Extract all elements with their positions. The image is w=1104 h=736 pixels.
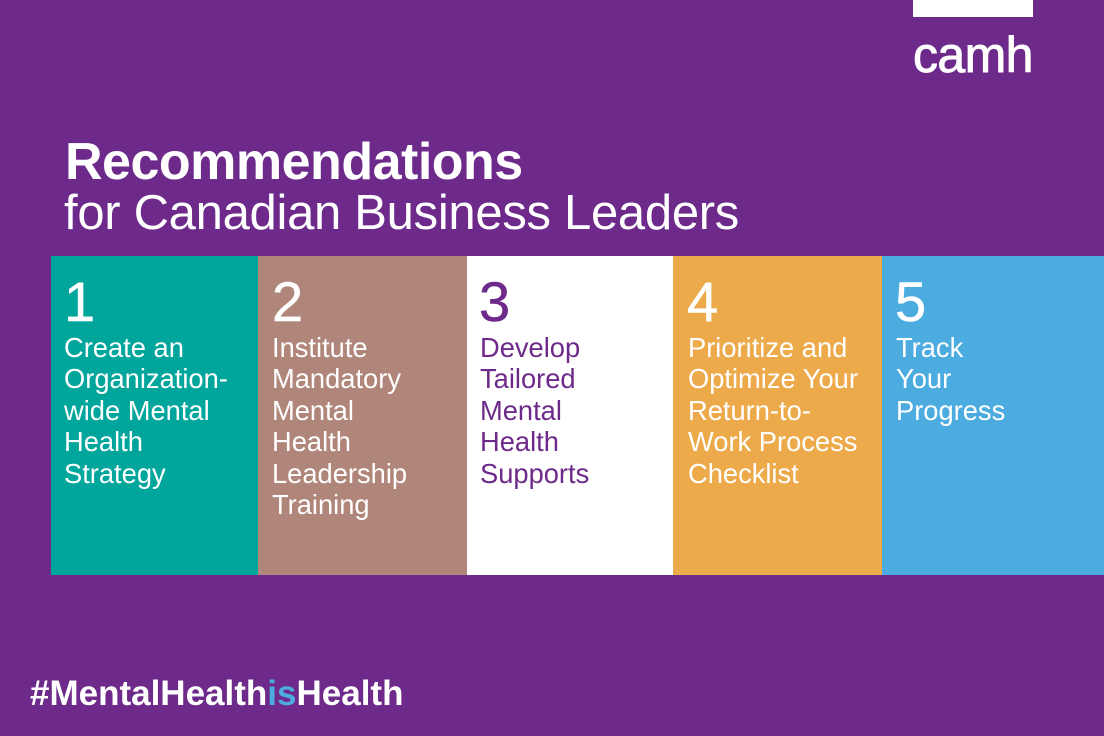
text 2: Institute Mandatory Mental Health Leadership Training: [272, 332, 407, 520]
number 3: 3: [479, 270, 510, 333]
text 3: Develop Tailored Mental Health Supports: [480, 332, 589, 489]
logo: camh wordmark: camh: [913, 27, 1033, 83]
text 4: Prioritize and Optimize Your Return-to- Work Process Checklist: [688, 332, 858, 489]
logo: white bar: [913, 0, 1033, 17]
panel: recommendation 4: [673, 256, 882, 575]
text 5: Track Your Progress: [896, 332, 1005, 426]
panel: recommendation 3: [467, 256, 673, 575]
title line 2: for Canadian Business Leaders: [64, 186, 739, 240]
panel: recommendation 2: [258, 256, 467, 575]
title: [64, 133, 739, 240]
hashtag: #MentalHealthisHealth: [30, 674, 403, 713]
number 1: 1: [64, 270, 95, 333]
panel: recommendation 5: [882, 256, 1104, 575]
number 5: 5: [895, 270, 926, 333]
title line 1: Recommendations: [65, 133, 523, 191]
panel: recommendation 1: [51, 256, 258, 575]
number 4: 4: [687, 270, 718, 333]
text 1: Create an Organization- wide Mental Health Strategy: [64, 332, 228, 489]
number 2: 2: [272, 270, 303, 333]
